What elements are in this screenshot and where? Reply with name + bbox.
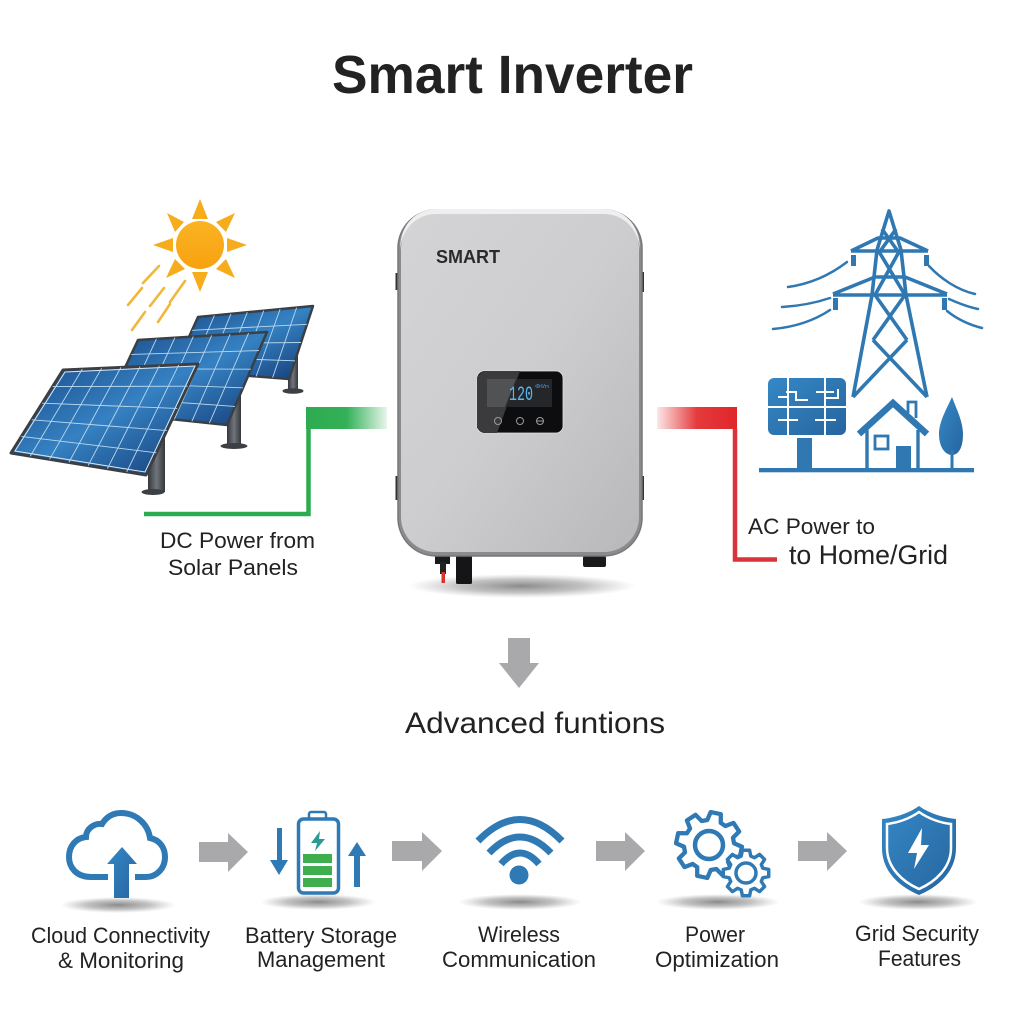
feature: wireless communication: Communication	[442, 947, 596, 972]
feature: battery storage	[245, 812, 397, 972]
label: DC power: Solar Panels	[168, 555, 298, 580]
front solar panel	[11, 364, 198, 495]
arrow: step 4	[798, 832, 847, 871]
feature: grid security: Features	[878, 946, 961, 971]
brand label: SMART	[436, 247, 500, 267]
feature: wireless communication	[442, 820, 596, 972]
arrow: step 3	[596, 832, 645, 871]
label: AC power: to Home/Grid	[789, 540, 948, 570]
feature: power optimization	[655, 806, 780, 972]
middle solar panel	[104, 332, 267, 449]
inverter face	[401, 214, 639, 552]
label: AC power	[748, 514, 948, 570]
display: ΦI/n	[535, 384, 549, 390]
label: DC power	[160, 528, 315, 580]
display	[477, 371, 563, 433]
icon: transmission tower	[773, 211, 982, 397]
inverter	[396, 209, 644, 598]
inverter body	[398, 210, 642, 556]
feature: battery storage: Battery Storage	[245, 923, 397, 948]
feature: cloud connectivity: & Monitoring	[58, 948, 184, 973]
tree icon	[939, 397, 963, 470]
display: 120	[509, 384, 533, 407]
arrow: step 2	[392, 832, 442, 871]
inverter side tabs	[396, 272, 644, 500]
house icon	[859, 402, 927, 470]
inverter shadow	[408, 574, 636, 598]
feature: grid security: Grid Security	[855, 921, 979, 946]
heading: advanced functions: Advanced funtions	[405, 707, 665, 740]
back solar panel	[174, 306, 313, 394]
inverter top lip	[400, 209, 640, 250]
label: DC power: DC Power from	[160, 528, 315, 553]
feature: battery storage: Management	[257, 947, 385, 972]
arrow: step 1	[199, 833, 248, 872]
arrow: AC power line (red)	[657, 407, 777, 560]
inverter connectors	[435, 556, 606, 584]
feature: cloud connectivity	[31, 813, 210, 973]
feature: power optimization: Optimization	[655, 947, 779, 972]
icon: solar house and tree	[759, 378, 974, 472]
label: AC power: AC Power to	[748, 514, 875, 539]
title: Smart Inverter	[332, 45, 693, 105]
solar panel icon	[768, 378, 846, 469]
arrow: DC power line (green)	[144, 407, 387, 514]
feature: wireless communication: Wireless	[478, 922, 560, 947]
icon: sun	[128, 199, 247, 330]
feature: grid security	[855, 806, 979, 971]
ground line	[759, 468, 974, 472]
feature: power optimization: Power	[685, 922, 745, 947]
solar panels	[11, 306, 313, 495]
feature: cloud connectivity: Cloud Connectivity	[31, 923, 210, 948]
arrow: down to advanced functions	[499, 638, 539, 688]
